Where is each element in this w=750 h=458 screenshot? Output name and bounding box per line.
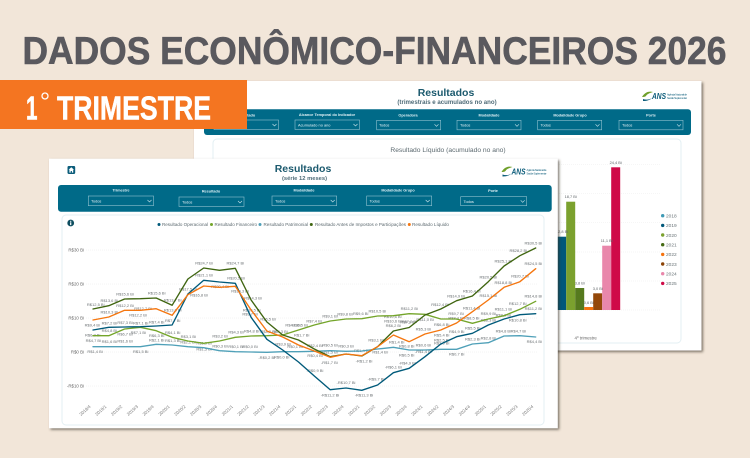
data value labels: R$11,2 Bi [525,306,542,311]
x axis labels: 2021/3 [252,404,266,417]
data value labels: R$0,1 Bi [287,344,303,349]
logo: ANS front panel [502,166,547,176]
data value labels: -R$9,7 Bi [368,377,384,382]
x axis labels: 2025/2 [489,404,503,417]
panel: line chart card [62,215,544,425]
logo: ANS back panel: ANS [651,91,666,101]
data value labels: R$20,4 Bi [211,284,229,289]
panel: back dashboard, quarterly results [194,81,702,350]
data value labels: R$16,8 Bi [190,292,208,297]
data value labels: R$8,5 Bi [464,315,479,320]
data value labels: R$7,4 Bi [306,318,322,323]
filter bar: back panel: Todos [379,122,389,128]
logo: ANS front panel: Saúde Suplementar [526,171,547,175]
line: Resultado Antes de Impostos e Participações [93,248,536,357]
data value labels: R$8,3 Bi [481,317,496,322]
x axis labels: 2022/2 [300,404,313,417]
data value labels: R$1,5 Bi [196,346,212,351]
bar chart: 4th quarter by year: 11,1 Bi [601,238,613,243]
data value labels: R$1,4 Bi [389,340,404,345]
data value labels: R$6,5 Bi [260,316,276,321]
data value labels: -R$6,1 Bi [385,365,402,370]
data value labels: R$12,5 Bi [87,302,105,307]
filter bar: back panel: Todos [622,122,632,128]
line: Resultado Patrimonial [93,336,536,352]
data value labels: R$11,4 Bi [463,305,480,310]
banner: 1st quarter [0,80,247,129]
line: Resultado Operacional [93,280,536,390]
y axis labels: -R$10 Bi [67,384,84,388]
data value labels: R$7,1 Bi [131,330,146,335]
y axis labels: R$10 Bi [68,316,84,320]
data value labels: R$4,8 Bi [244,328,259,333]
filter bar: front panel: Todos [182,199,192,204]
data value labels: R$24,7 Bi [227,260,244,265]
data value labels: R$7,4 Bi [149,319,164,324]
bar chart: 4th quarter by year: 18,7 Bi [565,194,577,199]
data value labels: R$9,1 Bi [322,313,338,318]
data value labels: R$4,3 Bi [272,329,288,334]
line: Resultado Financeiro [93,301,536,343]
data value labels: R$12,4 Bi [431,302,449,307]
x axis labels: 2023/3 [379,404,392,417]
data value labels: R$14,9 Bi [447,294,465,299]
data value labels: R$7,1 Bi [133,321,148,326]
data value labels: R$25,1 Bi [495,259,512,264]
legend: years: 2022 [666,252,677,258]
data value labels: R$0,3 Bi [212,343,228,348]
data value labels: R$5,4 Bi [434,332,449,337]
filter bar: front panel: Resultado [202,190,221,194]
data value labels: R$28,2 Bi [510,248,527,253]
legend: years: 2019 [666,223,677,229]
data value labels: R$4,4 Bi [527,339,542,344]
data value labels: R$3,9 Bi [275,341,291,346]
data value labels: R$4,8 Bi [102,328,117,333]
chart title: Resultado Líquido (acumulado no ano) [390,147,506,154]
data value labels: R$17,5 Bi [179,286,197,291]
data value labels: R$4,7 Bi [86,338,101,343]
legend: years: 2024 [666,272,677,278]
panel: front dashboard, 12-month series [49,159,558,428]
filter bar: back panel: Resultado [237,114,256,118]
legend: years: 2020 [666,233,677,239]
bar chart: 4th quarter by year: 0,6 Bi [584,300,594,305]
data value labels: R$10,6 Bi [384,314,402,319]
data value labels: R$0,0 Bi [242,344,258,349]
data value labels: R$16,4 Bi [463,288,481,293]
filter bar: front panel: Modalidade Grupo [381,188,415,192]
data value labels: R$13,0 Bi [164,307,182,312]
bar chart: 4th quarter by year: 24,4 Bi [610,160,622,165]
data value labels: R$0,5 Bi [322,343,338,348]
data value labels: R$6,2 Bi [386,323,401,328]
data value labels: R$5,3 Bi [416,326,431,331]
data value labels: R$15,6 Bi [148,290,166,295]
x axis labels: 2022/4 [331,404,345,417]
data value labels: R$13,7 Bi [164,297,182,302]
filter bar: back panel: Todos [460,122,470,128]
heading: back panel: (trimestrais e acumulados no ano) [397,99,497,106]
data value labels: R$1,5 Bi [133,349,148,354]
x axis labels: 2025/4 [521,404,535,417]
y axis labels: R$0 Bi [71,350,84,354]
data value labels: R$11,2 Bi [401,306,418,311]
banner: 1st quarter: 1 [26,90,38,127]
x axis labels: 2025/1 [474,404,487,417]
x axis labels: 2021/4 [268,404,282,417]
x axis labels: 2024/4 [458,404,471,417]
data value labels: R$6,3 Bi [149,333,164,338]
bar chart: 4th quarter by year: 3,8 Bi [575,280,585,286]
heading: front panel: (série 12 meses) [282,176,327,182]
filter bar: back panel: Acumulado no ano [298,122,330,127]
icon: info [67,220,74,226]
filter bar: back panel: Todos [217,122,227,127]
data value labels: R$1,4 Bi [372,350,388,355]
data value labels: R$10,3 Bi [101,309,118,314]
x axis labels: 2024/2 [426,404,440,417]
x axis labels: 2021/2 [236,404,250,417]
data value labels: R$0,8 Bi [399,343,414,348]
data value labels: R$15,6 Bi [116,291,134,296]
filter bar: back panel: Modalidade [479,114,499,118]
data value labels: R$0,3 Bi [338,343,354,348]
data value labels: R$5,5 Bi [465,326,480,331]
panel: net result bar chart card [213,139,681,343]
filter bar: back panel: Operadora [398,114,418,118]
data value labels: -R$11,2 Bi [321,392,339,397]
data value labels: -R$1,2 Bi [356,359,372,364]
x axis labels: 2022/1 [284,404,298,417]
data value labels: R$0,1 Bi [228,344,244,349]
x axis labels: 2019/1 [94,404,108,417]
data value labels: R$12,7 Bi [509,301,527,306]
data value labels: R$10,5 Bi [369,308,386,313]
data value labels: R$4,3 Bi [228,329,244,334]
data value labels: R$0,6 Bi [416,342,431,347]
x axis labels: 2019/3 [126,404,139,417]
data value labels: R$19,3 Bi [231,288,249,293]
data value labels: R$1,3 Bi [165,338,180,343]
logo: ANS front panel: Agência Nacional de [526,168,547,172]
data value labels: -R$4,9 Bi [399,361,416,366]
x axis labels: 2020/2 [173,404,187,417]
data value labels: R$2,4 Bi [307,343,323,348]
data value labels: R$18,8 Bi [495,280,512,285]
data value labels: R$10,5 Bi [243,307,261,312]
filter bar: front panel [58,185,552,212]
data value labels: R$7,7 Bi [165,318,180,323]
data value labels: R$24,5 Bi [525,261,542,266]
data value labels: R$14,8 Bi [525,294,542,299]
legend: series: Resultado Financeiro [214,222,257,227]
filter bar: front panel: Porte [488,189,498,193]
data value labels: R$14,3 Bi [244,295,262,300]
data value labels: R$12,7 Bi [134,306,152,311]
data value labels: R$6,5 Bi [292,322,308,327]
filter bar: front panel: Todos [464,199,474,204]
bar chart: 4th quarter by year: 3,0 Bi [593,286,603,291]
data value labels: R$1,5 Bi [322,349,338,354]
data value labels: R$11,0 Bi [416,317,434,322]
data value labels: R$9,7 Bi [242,311,258,316]
data value labels: R$1,7 Bi [294,332,309,337]
filter bar: back panel: Alcance Temporal do Indicador [299,113,356,117]
data value labels: R$4,3 Bi [260,329,276,334]
data value labels: R$7,2 Bi [102,320,117,325]
logo: ANS front panel: ANS [511,166,526,176]
x axis labels: 2025/3 [505,404,519,417]
data value labels: R$9,6 Bi [353,311,368,316]
heading: front panel: Resultados [275,163,331,175]
data value labels: R$24,7 Bi [195,260,213,265]
legend: years [661,214,677,287]
data value labels: R$21,1 Bi [195,272,213,277]
filter bar: front panel: Trimestre [112,188,130,192]
filter bar: front panel: Modalidade [294,188,314,192]
logo: ANS back panel: Agência Nacional de [667,92,688,96]
filter bar: front panel: Todos [275,198,285,204]
data value labels: -R$1,7 Bi [321,360,338,365]
data value labels: R$3,1 Bi [368,337,384,342]
y axis labels: R$30 Bi [68,248,84,252]
data value labels: R$0,4 Bi [307,353,323,358]
legend: series: Resultado Operacional [162,222,208,227]
data value labels: R$9,7 Bi [448,311,464,316]
data value labels: R$7,2 Bi [400,320,416,325]
data value labels: R$1,4 Bi [354,348,369,353]
data value labels: R$2,3 Bi [465,337,480,342]
data value labels: R$1,6 Bi [102,339,117,344]
logo: ANS back panel: Saúde Suplementar [667,96,687,100]
data value labels: R$10,8 Bi [509,317,527,322]
data value labels: R$2,8 Bi [481,336,496,341]
x axis labels: 2019/4 [142,404,155,417]
data value labels: R$20,5 Bi [480,274,497,279]
legend: years: 2023 [666,262,677,268]
data value labels: R$0,5 Bi [399,352,414,357]
data value labels: R$9,9 Bi [496,312,511,317]
data value labels: R$4,8 Bi [496,328,511,333]
data value labels: R$11,1 Bi [495,306,512,311]
data value labels: R$6,8 Bi [434,322,449,327]
legend: series: Resultado Líquido [412,222,449,227]
x axis labels: 2023/1 [347,404,361,417]
x axis labels: 2020/3 [189,404,203,417]
data value labels: R$9,4 Bi [85,322,100,327]
x axis labels: 2023/2 [363,404,377,417]
x axis labels: 2019/2 [110,404,124,417]
data value labels: R$7,2 Bi [402,319,417,324]
legend: years: 2021 [666,242,677,248]
data value labels: R$2,1 Bi [180,339,196,344]
data value labels: R$3,2 Bi [212,333,228,338]
data value labels: -R$1,4 Bi [415,349,432,354]
filter bar: back panel: Porte [646,114,656,118]
heading: front panel [275,163,331,182]
x axis labels: 2020/4 [205,404,219,417]
data value labels: R$4,1 Bi [285,322,301,327]
x axis labels: 2024/3 [442,404,456,417]
data value labels: R$20,5 Bi [227,275,245,280]
data value labels [85,241,542,398]
filter bar: back panel: Modalidade Grupo [553,114,587,118]
data value labels: R$9,9 Bi [481,311,496,316]
axis label: 4º trimestre [575,336,597,340]
data value labels: R$9,8 Bi [337,311,353,316]
data value labels: R$1,4 Bi [87,349,103,354]
data value labels: R$6,3 Bi [85,332,100,337]
legend: years: 2025 [666,281,677,287]
data value labels: R$12,2 Bi [116,303,134,308]
legend: series: Resultado Patrimonial [264,222,308,227]
data value labels: R$0,7 Bi [449,352,464,357]
legend: series [158,222,449,227]
heading: back panel [397,87,497,106]
filter bar: back panel [204,109,691,135]
bar chart: 4th quarter by year [552,160,622,310]
line: Resultado Líquido [93,269,536,357]
data value labels: -R$0,2 Bi [258,355,275,360]
filter bar: front panel: Todos [91,198,101,204]
data value labels: R$1,6 Bi [117,338,133,343]
data value labels: -R$10,7 Bi [337,380,356,385]
x axis labels: 2021/1 [221,404,234,417]
data value labels: R$4,9 Bi [449,329,464,334]
filter bar: front panel: Todos [370,198,380,204]
banner: 1st quarter: TRIMESTRE [57,90,211,127]
legend: years: 2018 [666,214,677,220]
data value labels: R$8,4 Bi [448,316,464,321]
x axis labels: 2018/4 [78,404,92,417]
filter bar: back panel: Todos [540,122,551,128]
bar chart: 4th quarter by year: 12,8 Bi [556,229,568,234]
data value labels: R$15,1 Bi [480,293,497,298]
y axis labels [67,248,84,388]
x axis labels: 2024/1 [410,404,424,417]
y axis labels: R$20 Bi [68,282,84,286]
heading: back panel: Resultados [418,87,474,99]
x axis labels: 2020/1 [157,404,171,417]
data value labels: R$4,7 Bi [511,328,526,333]
data value labels: R$7,3 Bi [117,320,133,325]
data value labels: R$2,5 Bi [434,337,449,342]
x axis labels: 2022/3 [316,404,329,417]
data value labels: R$2,0 Bi [434,341,449,346]
data value labels: R$10,6 Bi [384,318,402,323]
data value labels: -R$11,3 Bi [355,393,373,398]
data value labels: R$30,5 Bi [525,241,542,246]
x axis labels [78,404,535,417]
data value labels: R$3,1 Bi [181,334,196,339]
data value labels: R$4,1 Bi [165,330,180,335]
x axis labels: 2023/4 [395,404,408,417]
data value labels: -R$0,9 Bi [307,368,323,373]
logo: ANS back panel [642,91,688,101]
data value labels: R$12,2 Bi [129,313,147,318]
data value labels: R$2,1 Bi [149,337,164,342]
icon: home [68,166,75,174]
data value labels: R$20,7 Bi [511,274,529,279]
legend: series: Resultado Antes de Impostos e Participações [315,222,407,227]
data value labels: R$13,6 Bi [101,298,118,303]
data value labels: R$0,0 Bi [274,355,289,360]
data value labels: R$1,9 Bi [196,340,212,345]
data value labels: R$6,7 Bi [117,331,133,336]
